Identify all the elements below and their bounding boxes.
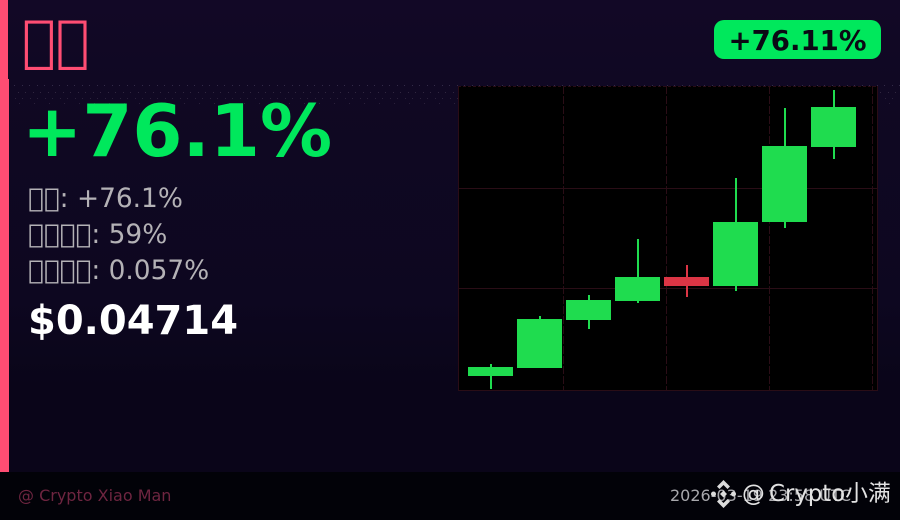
dotted texture band <box>14 85 900 104</box>
change badge <box>714 20 881 59</box>
candle 8 <box>811 90 856 159</box>
stat: funding rate: : 0.057% <box>28 255 209 286</box>
candle 3 <box>566 295 611 329</box>
stat: long ratio: : 59% <box>28 219 167 250</box>
candle 7 <box>762 108 807 228</box>
candle 4 <box>615 239 660 303</box>
title:  <box>22 9 89 74</box>
change badge: +76.11% <box>728 24 867 57</box>
accent bar <box>0 0 8 79</box>
candlestick chart <box>458 86 878 391</box>
big percent change: +76.1% <box>22 89 332 173</box>
footer <box>0 472 900 520</box>
stat lines <box>28 183 209 286</box>
price: $0.04714 <box>28 298 238 344</box>
accent bar lower <box>0 79 9 472</box>
candle 5 <box>664 265 709 297</box>
watermark text: @ Crypto小满 <box>742 481 891 507</box>
candle 2 <box>517 316 562 368</box>
stat: change: : +76.1% <box>28 183 183 214</box>
footer timestamp: 2026-03-19 23:58 UTC <box>670 486 851 505</box>
footer handle: @ Crypto Xiao Man <box>18 486 171 505</box>
icon: watermark diamond <box>711 480 736 508</box>
candle 6 <box>713 178 758 291</box>
candle 1 <box>468 364 513 389</box>
